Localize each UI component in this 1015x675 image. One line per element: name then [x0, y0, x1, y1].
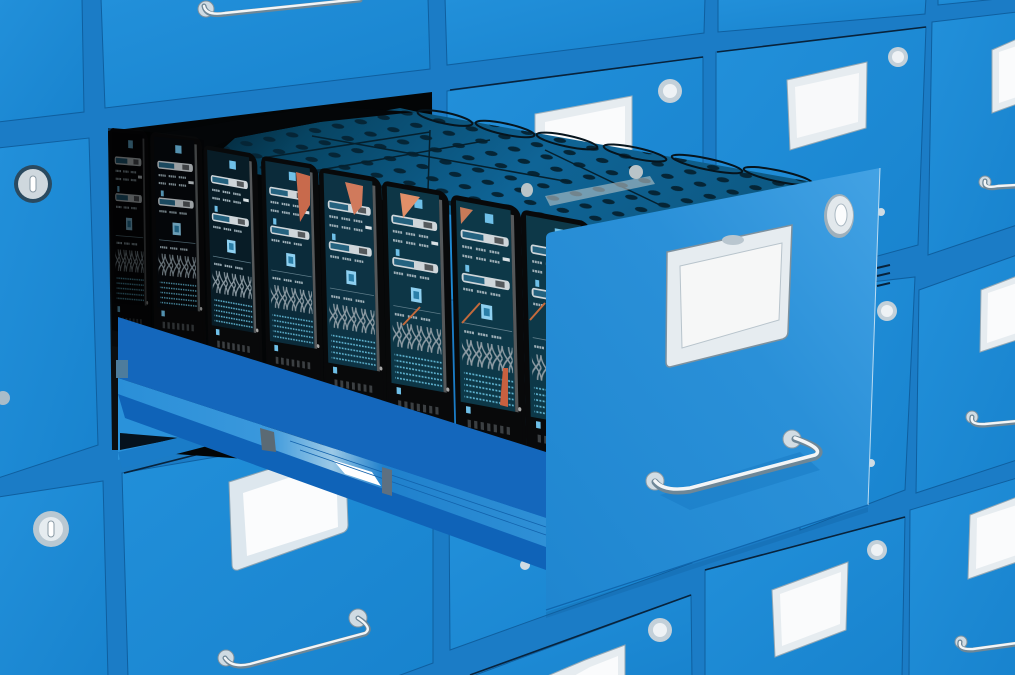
server 2 — [150, 132, 206, 355]
label: lower centre-right drawer — [772, 562, 848, 657]
server 3 — [203, 145, 263, 379]
interior below open drawer — [118, 378, 270, 468]
cabinet drawers: top row — [0, 0, 1015, 122]
label: far right lower — [968, 497, 1015, 579]
lock cylinders on drawers — [0, 47, 908, 642]
server 4 — [261, 155, 324, 396]
front panel label holder — [666, 225, 792, 367]
server 7 — [451, 194, 527, 465]
front panel handle — [646, 430, 820, 510]
server 8 — [521, 209, 597, 480]
cabinet drawers: middle rows — [0, 12, 1015, 530]
label: far right top — [992, 39, 1015, 113]
cable loops on server backs — [416, 107, 813, 189]
opening left frame interior — [108, 130, 120, 450]
front panel lock — [824, 194, 854, 238]
server 5 — [319, 167, 387, 421]
drawer slide rail — [116, 360, 546, 570]
open drawer side panel — [118, 317, 546, 518]
server units — [109, 128, 597, 480]
dark shadow lines above drawers — [124, 27, 926, 675]
label: top right drawer — [787, 62, 867, 150]
label: far right middle — [980, 276, 1015, 352]
cabinet opening — [108, 92, 433, 460]
server 1 — [109, 128, 151, 349]
server tops with fan vents — [150, 106, 812, 240]
label: bottom centre drawer — [545, 645, 625, 675]
cabinet drawers: bottom row — [0, 420, 1015, 675]
reflections on server tops — [521, 165, 655, 206]
open drawer front panel — [546, 168, 880, 610]
label: back drawer — [535, 96, 632, 180]
server 6 — [382, 180, 455, 444]
orange reflections on servers — [296, 172, 545, 407]
drawer handles — [198, 0, 1015, 666]
shading over rear servers — [108, 128, 206, 360]
shadow under open drawer front — [546, 507, 868, 618]
label: bottom large drawer — [229, 445, 348, 570]
